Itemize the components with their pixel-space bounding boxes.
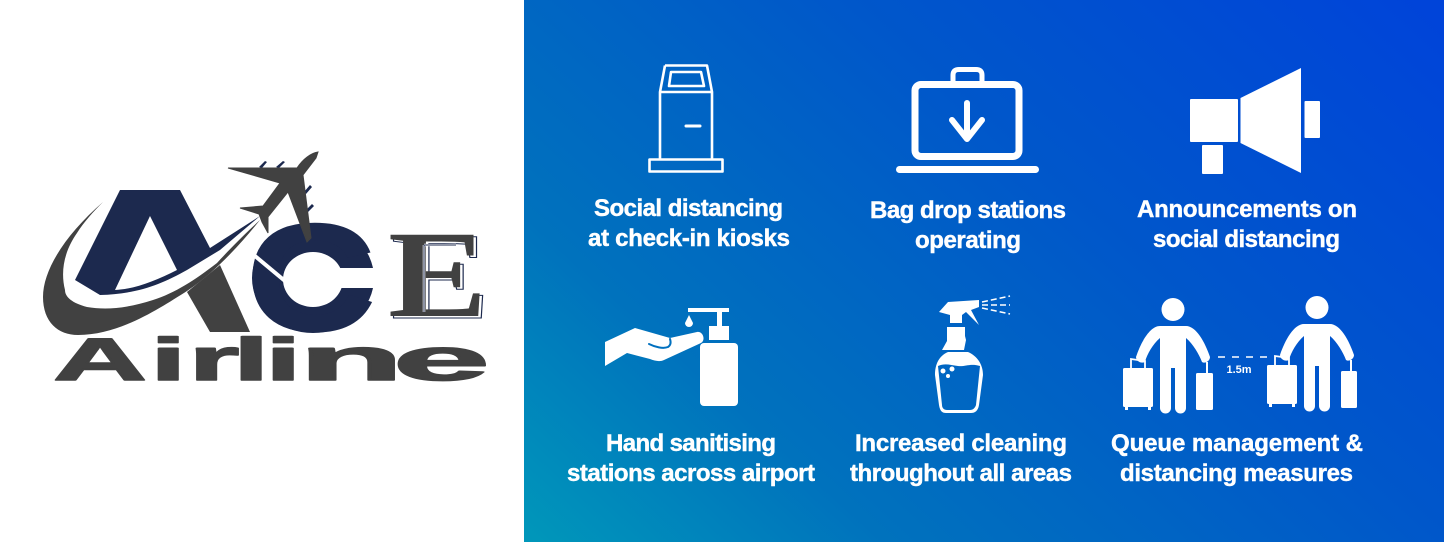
text: announcements on social distancing: social distancing <box>1153 226 1340 253</box>
text: social distancing at check-in kiosks: at check-in kiosks <box>588 225 790 252</box>
text: queue management and distancing: Queue management & <box>1111 430 1363 457</box>
text: increased cleaning: throughout all areas <box>850 460 1072 487</box>
icon: hand sanitiser dispenser <box>605 308 738 406</box>
text: hand sanitising stations: stations across airport <box>567 460 815 487</box>
logo word Airline: e <box>393 326 490 393</box>
text: hand sanitising stations: Hand sanitising <box>606 430 776 457</box>
icon: check-in kiosk <box>650 66 722 172</box>
logo letter C: C <box>245 191 377 364</box>
text: increased cleaning: Increased cleaning <box>855 430 1067 457</box>
logo swoosh <box>43 202 260 335</box>
logo word Airline: n <box>299 326 403 393</box>
logo airplane <box>228 152 318 242</box>
logo letter E: E <box>391 208 490 345</box>
traveller right <box>1267 296 1357 412</box>
icon: megaphone <box>1190 68 1320 174</box>
icon: bag drop laptop <box>900 70 1036 170</box>
icon: spray bottle <box>935 296 1010 413</box>
text: announcements on social distancing: Announcements on <box>1137 196 1357 223</box>
logo word Airline: Airli <box>53 326 301 393</box>
panel: blue gradient background <box>524 0 1444 542</box>
text: announcements on social distancing <box>1137 196 1357 253</box>
logo letter A <box>75 190 260 332</box>
logo letter A: A <box>49 146 248 376</box>
logo letter E: E <box>388 206 487 343</box>
distance marker <box>1218 357 1273 376</box>
text: bag drop stations operating: Bag drop stations <box>870 197 1066 224</box>
traveller left <box>1123 298 1213 414</box>
text: queue management and distancing: distancing measures <box>1120 460 1353 487</box>
text: bag drop stations operating: operating <box>915 227 1021 254</box>
text: hand sanitising stations <box>567 430 815 487</box>
text: bag drop stations operating <box>870 197 1066 254</box>
panel: white logo background <box>0 0 524 542</box>
distance marker: 1.5m <box>1226 364 1252 376</box>
text: increased cleaning <box>850 430 1072 487</box>
icon: queue distancing with travellers <box>1123 296 1357 414</box>
logo word Airline <box>53 326 490 393</box>
logo letter A: A <box>49 146 248 376</box>
text: social distancing at check-in kiosks <box>588 195 790 252</box>
logo: Ace Airline <box>43 146 490 393</box>
text: queue management and distancing <box>1111 430 1363 487</box>
text: social distancing at check-in kiosks: Social distancing <box>594 195 783 222</box>
